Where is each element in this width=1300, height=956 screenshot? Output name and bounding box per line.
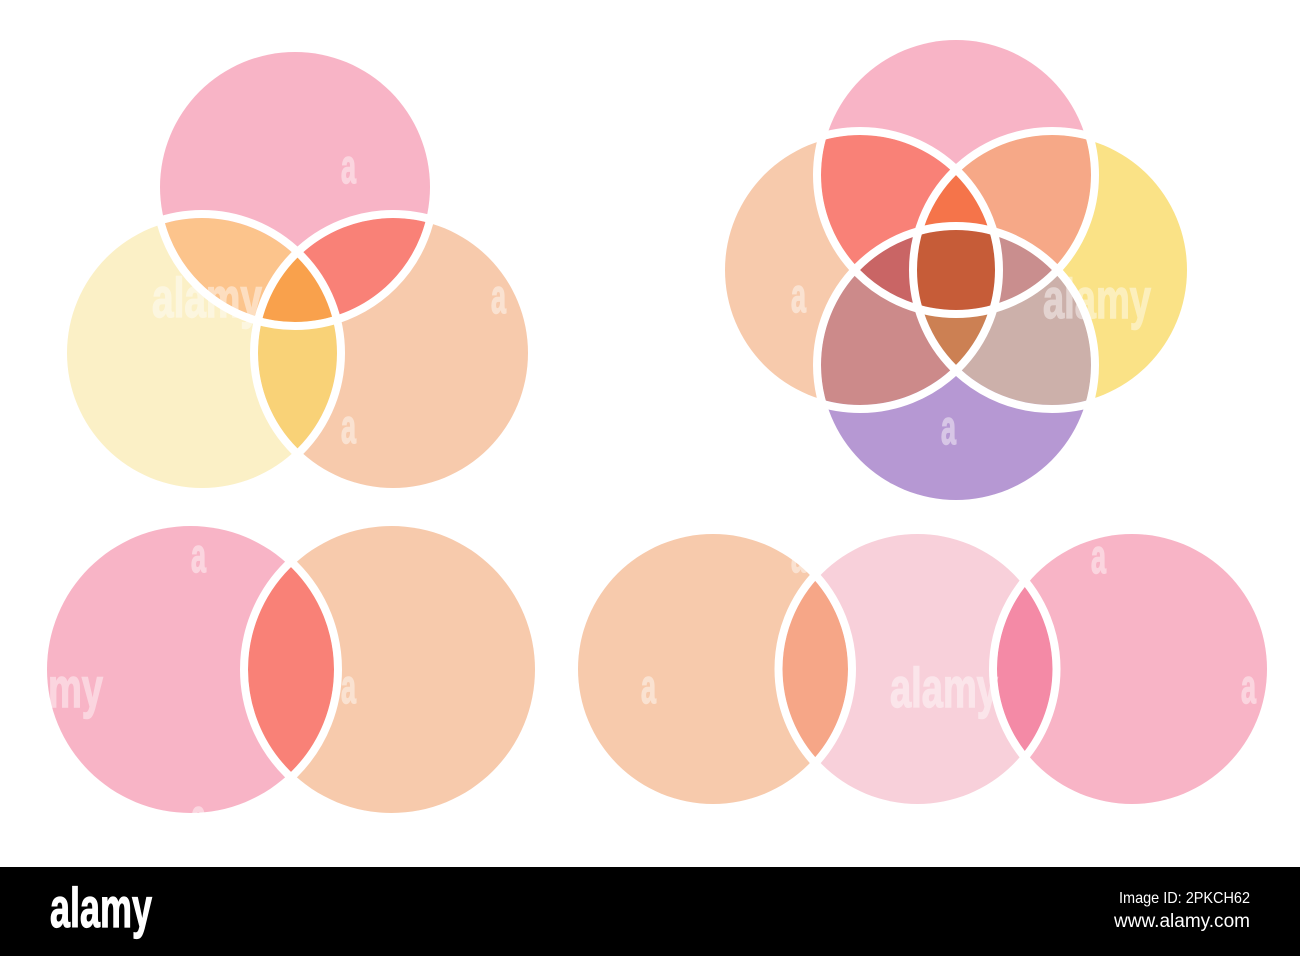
- overlap: top and right: [962, 135, 1091, 264]
- overlap: top and right: [298, 218, 426, 316]
- three-circle venn diagram: [63, 48, 532, 492]
- watermarks: a: [941, 402, 956, 455]
- overlap: right wedge: [924, 232, 1052, 306]
- watermarks: alamy: [152, 266, 262, 329]
- watermarks: a: [341, 661, 356, 714]
- overlap: left and middle: [782, 581, 848, 757]
- watermarks: a: [641, 661, 656, 714]
- circle: bottom right, peach: [258, 218, 528, 488]
- watermarks: a: [191, 791, 206, 844]
- website: www.alamy.com: [1113, 911, 1250, 932]
- watermarks: a: [1091, 531, 1106, 584]
- overlap: top and left: [165, 218, 292, 316]
- circle: left, pink: [47, 526, 334, 813]
- watermarks: a: [1241, 661, 1256, 714]
- white outlines inside overlaps: [157, 210, 433, 454]
- circle: bottom left, yellow: [67, 218, 337, 488]
- overlap: top wedge: [924, 176, 988, 234]
- watermarks: a: [791, 270, 806, 323]
- watermarks: [0, 141, 1256, 844]
- circle: bottom, purple: [821, 230, 1091, 500]
- circle: right, pink: [997, 534, 1267, 804]
- circle: middle, light pink: [782, 534, 1052, 804]
- watermarks: a: [191, 530, 206, 583]
- circle: right, yellow: [917, 135, 1187, 405]
- watermarks: a: [491, 271, 506, 324]
- circle: right, peach: [248, 526, 535, 813]
- watermarks: a: [791, 530, 806, 583]
- circle: top, pink: [160, 52, 430, 322]
- footer logo: alamy: [50, 876, 152, 939]
- watermarks: a: [341, 401, 356, 454]
- overlap: lens: [248, 567, 334, 772]
- overlap: bottom and left: [821, 271, 956, 405]
- circle: left, peach: [725, 135, 995, 405]
- image id: Image ID: 2PKCH62: [1119, 890, 1250, 907]
- circle: top, pink: [821, 40, 1091, 310]
- circle: left, peach: [578, 534, 848, 804]
- watermarks: alamy: [890, 656, 998, 719]
- overlap: left wedge: [860, 237, 913, 303]
- overlap: bottom and right: [960, 247, 1091, 405]
- four-circle venn diagram: [721, 36, 1191, 504]
- footer bar: [0, 867, 1300, 956]
- two-circle venn diagram: [43, 522, 539, 817]
- overlap: bottom wedge: [922, 306, 988, 365]
- white outlines inside overlaps: [813, 127, 1099, 413]
- white outlines around lenses: [774, 575, 1060, 763]
- watermarks: alamy: [1043, 267, 1151, 330]
- watermarks: a: [341, 141, 356, 194]
- overlap: centre of all three: [262, 258, 332, 322]
- three-circle chain diagram: [574, 530, 1271, 808]
- overlap: centre of all four: [917, 230, 995, 310]
- overlap: top and left: [821, 135, 956, 270]
- white outlines around lens: [240, 562, 342, 778]
- overlap: middle and right: [997, 587, 1052, 751]
- overlap: left and right: [258, 262, 337, 448]
